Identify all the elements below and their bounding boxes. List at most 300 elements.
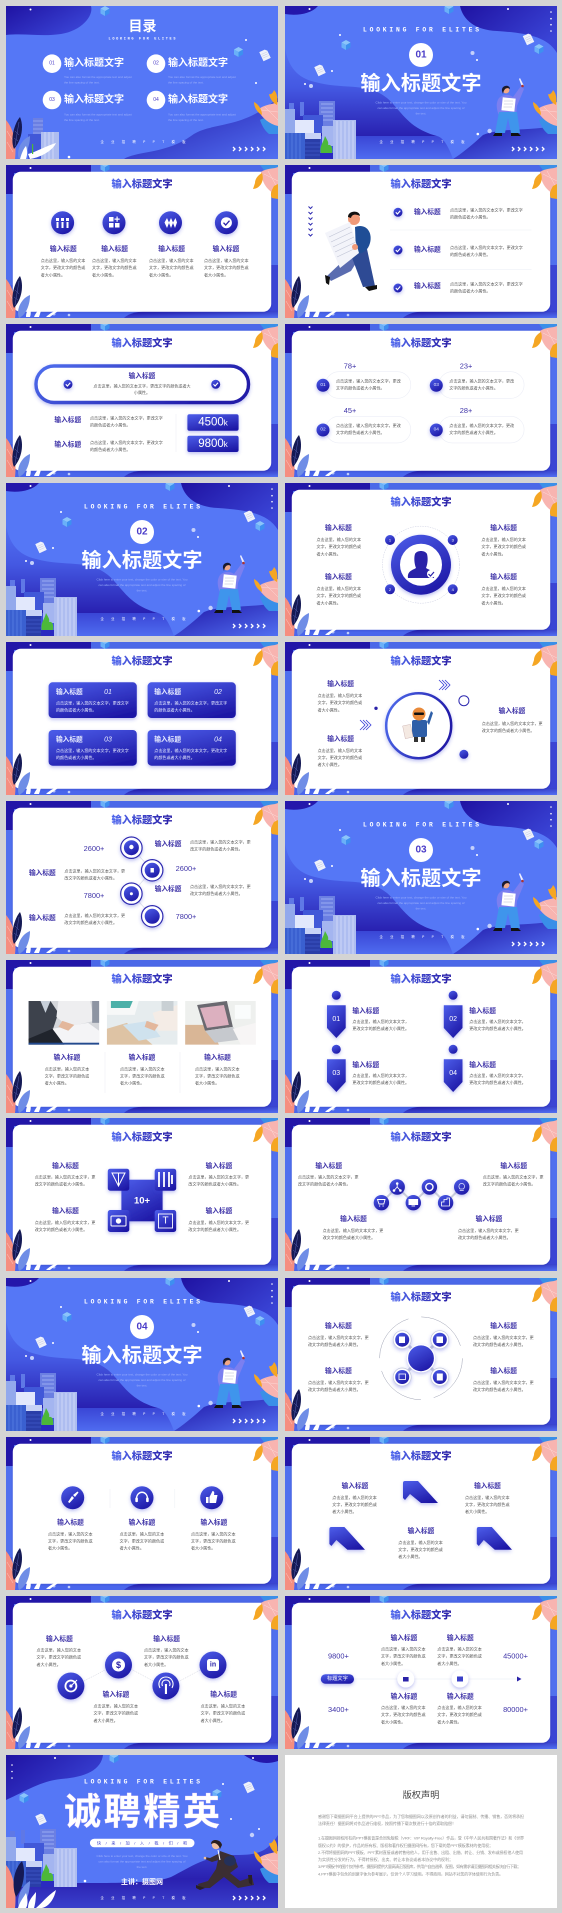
list row 2: 点击这里，输入您的文本文字，更改文字 xyxy=(450,244,523,250)
background card xyxy=(285,1275,557,1431)
background card xyxy=(285,480,557,636)
footer: 企业招聘PPT模板 xyxy=(380,934,465,939)
white panel xyxy=(285,1755,557,1908)
text block 2: 输入标题 xyxy=(153,1634,180,1643)
text block bottom left: 输入标题 xyxy=(52,1206,79,1215)
list row 1: 点击这里，输入您的文本文字，更改文字 xyxy=(450,206,523,212)
background card xyxy=(6,162,278,318)
tag 03 xyxy=(327,1045,409,1092)
text block top left: 点击这里，输入您的文本文字，更 xyxy=(298,1174,359,1180)
section description xyxy=(97,1372,188,1387)
text block bottom right: 文字，更改文字的颜色或 xyxy=(481,592,526,598)
tag 01: 输入标题 xyxy=(352,1006,379,1015)
card 03: 点击这里，输入您的文本文字，更改文字 xyxy=(56,747,129,753)
english heading: LOOKING FOR ELITES xyxy=(84,1778,200,1786)
text block top left: 改文字的颜色或者大小属性。 xyxy=(308,1341,361,1347)
copyright text: 感谢您下载摄图网平台上提供的PPT作品，为了您和摄图网以及原创作者的利益，请勿复制、传播、销售，否则将承担 xyxy=(318,1813,524,1819)
slide: zigzag icons xyxy=(285,1115,557,1271)
text block bottom right: 输入标题 xyxy=(206,1206,233,1215)
label left 2 xyxy=(29,912,125,925)
footer: 企业招聘PPT模板 xyxy=(100,1411,186,1416)
text block top right xyxy=(481,523,526,556)
footer: 企业招聘PPT模板 xyxy=(100,1895,186,1900)
description: can also format the appropriate text and adjust the line spacing of xyxy=(99,1860,186,1864)
text block bottom right: 输入标题 xyxy=(490,572,517,581)
text block bottom right: 输入标题 xyxy=(476,1214,503,1223)
text block bottom right: 改文字的颜色或者大小属性。 xyxy=(188,1226,241,1232)
label right 1 xyxy=(155,838,251,852)
tagline pill: 快 / 来 / 加 / 入 / 我 / 们 / 吧 xyxy=(97,1840,187,1846)
copyright text: 版权公约》的保护，作品的所有权、版权和著作权归摄图网所有，您下载的是PPT模板素材的使用权； xyxy=(318,1842,493,1848)
label right 2: 改文字的颜色或者大小属性。 xyxy=(190,890,243,896)
toc background xyxy=(6,6,278,159)
text block 3 xyxy=(94,1690,138,1723)
list row 1 xyxy=(394,206,523,220)
floating dots xyxy=(374,696,469,759)
column 1: 文字，更改文字的颜色或 xyxy=(48,1538,93,1544)
title: 输入标题文字 xyxy=(390,336,452,350)
text block top left xyxy=(318,679,362,712)
column 4: 者大小属性。 xyxy=(204,272,228,278)
decorative chevrons top xyxy=(439,680,450,690)
text block left: 输入标题 xyxy=(342,1481,369,1490)
toc item 03: 输入标题文字 xyxy=(64,92,124,106)
text block top 1: 点击这里，输入您的文本 xyxy=(381,1646,426,1652)
section background xyxy=(285,4,557,159)
column 2 text: 点击这里，输入您的文本 xyxy=(120,1066,165,1072)
title: 输入标题文字 xyxy=(390,178,452,190)
text block bottom 2: 文字，更改文字的颜色或 xyxy=(437,1711,482,1717)
text block bottom 2: 输入标题 xyxy=(447,1692,474,1700)
text block bottom left: 者大小属性。 xyxy=(316,600,341,606)
text block 4: 输入标题 xyxy=(210,1690,237,1698)
number badge: 02 xyxy=(136,526,148,538)
card 02: 输入标题 xyxy=(154,687,181,696)
background card xyxy=(6,798,278,954)
card 04: 点击这里，输入您的文本文字，更改文字 xyxy=(154,747,227,753)
label left 2: 输入标题 xyxy=(29,913,56,922)
tag 03: 更改文字的颜色或者大小属性。 xyxy=(352,1079,409,1085)
tag 03: 点击这里，输入您的文本文字， xyxy=(352,1072,409,1078)
text block 2: 文字，更改文字的颜色或 xyxy=(144,1654,189,1660)
toc item 02: 02 xyxy=(153,61,159,67)
text block bottom right xyxy=(473,1366,534,1392)
card 01: 的颜色或者大小属性。 xyxy=(56,706,96,712)
english heading: LOOKING FOR ELITES xyxy=(84,504,200,510)
title: 输入标题文字 xyxy=(111,654,173,668)
list row 3: 输入标题 xyxy=(414,281,441,290)
card 03: 03 xyxy=(104,736,112,744)
10+ diagram: T xyxy=(162,1216,169,1226)
copyright text: 为实质性分发的行为。不得转授权、出卖、转让本协议或者本协议中的权利； xyxy=(318,1856,453,1862)
toc item 03: 03 xyxy=(49,97,55,103)
section description xyxy=(97,578,188,592)
text block bottom: 点击这里，输入您的文本 xyxy=(398,1539,443,1545)
text block top 2: 点击这里，输入您的文本 xyxy=(437,1646,482,1652)
label left 1 xyxy=(29,868,125,880)
background card xyxy=(6,639,278,795)
text block bottom 2: 者大小属性。 xyxy=(437,1718,462,1724)
item 04: 文字的颜色或者大小属性。 xyxy=(449,429,498,435)
title: 输入标题文字 xyxy=(111,336,173,350)
number badge xyxy=(409,43,433,67)
list row 3: 的颜色或者大小属性。 xyxy=(450,288,490,294)
label right 2: 输入标题 xyxy=(155,884,182,893)
tag 01: 01 xyxy=(332,1016,340,1023)
column 1: 者大小属性。 xyxy=(48,1544,72,1550)
section description: the text. xyxy=(416,111,426,115)
background card xyxy=(6,1593,278,1749)
section description: the text. xyxy=(416,906,426,910)
text block right: 点击这里，输入您的文本 xyxy=(465,1494,510,1500)
title: 输入标题文字 xyxy=(390,1608,452,1622)
stat box 9800k xyxy=(187,436,239,452)
english heading: LOOKING FOR ELITES xyxy=(363,26,479,34)
slide: 10+ cluster xyxy=(6,1115,278,1271)
text block bottom: 输入标题 xyxy=(408,1526,435,1535)
list row 2: 的颜色或者大小属性。 xyxy=(450,251,490,257)
text block left: 者大小属性。 xyxy=(332,1508,357,1514)
stat numbers xyxy=(84,844,196,921)
toc item 01: the line spacing of the text. xyxy=(64,80,100,84)
text block bottom 1 xyxy=(381,1692,426,1724)
section description: the text. xyxy=(137,588,147,592)
slide: three round icons xyxy=(6,1434,278,1590)
card 02 xyxy=(148,682,236,718)
column 2: 者大小属性。 xyxy=(92,272,116,278)
row 2: 输入标题 xyxy=(54,440,81,448)
text block top right: 点击这里，输入您的文本文字，更 xyxy=(188,1174,249,1180)
column 3 text: 输入标题 xyxy=(204,1052,231,1062)
row 2: 的颜色或者大小属性。 xyxy=(90,446,130,452)
text block bottom xyxy=(398,1526,443,1559)
text block top left: 者大小属性。 xyxy=(316,550,341,556)
text block right: 输入标题 xyxy=(499,706,526,715)
item 03: 03 xyxy=(434,382,439,388)
section description: the text. xyxy=(137,1383,147,1387)
background card xyxy=(285,1593,557,1749)
highlighted pill: 点击这里，输入您的文本文字，更改文字的颜色或者大 xyxy=(93,382,191,388)
text block top 2: 输入标题 xyxy=(447,1633,474,1642)
column 1 text: 点击这里，输入您的文本 xyxy=(45,1066,89,1072)
column 4 xyxy=(204,211,249,278)
text block top right: 文字，更改文字的颜色或 xyxy=(481,543,526,549)
text block bottom left: 者大小属性。 xyxy=(318,761,342,767)
item 03: 点击这里，输入您的文本文字，更改 xyxy=(449,378,514,384)
column 1: 者大小属性。 xyxy=(41,272,65,278)
text block top left: 文字，更改文字的颜色或 xyxy=(316,543,361,549)
text block top right: 输入标题 xyxy=(500,1161,527,1170)
text block top right: 输入标题 xyxy=(206,1161,233,1170)
label left 1: 输入标题 xyxy=(29,868,56,877)
text block top right: 点击这里，输入您的文本 xyxy=(481,536,526,542)
label right 1: 改文字的颜色或者大小属性。 xyxy=(190,846,243,852)
background card xyxy=(285,162,557,318)
label right 2 xyxy=(155,883,251,896)
text block bottom right xyxy=(458,1214,519,1240)
card 03: 输入标题 xyxy=(56,734,83,744)
row 2: 点击这里，输入您的文本文字，更改文字 xyxy=(90,439,163,445)
toc item 01 xyxy=(43,54,132,84)
column 3 text xyxy=(195,1052,240,1086)
section description: Click here to enter your text, change the color or size of the text. You xyxy=(376,100,467,104)
stat numbers: 2600+ xyxy=(84,844,104,853)
icon wave xyxy=(57,1652,227,1700)
column 3 text: 者大小属性。 xyxy=(195,1080,219,1086)
background card xyxy=(6,321,278,477)
slide: pill and stats xyxy=(6,321,278,477)
stat box 4500k xyxy=(187,414,239,431)
section description: can also format the appropriate text and adjust the line spacing of xyxy=(378,901,465,905)
text block 3: 点击这里，输入您的文本 xyxy=(94,1702,138,1708)
slide: section 01 xyxy=(285,4,557,159)
text block bottom right xyxy=(188,1206,249,1232)
toc item 04: the line spacing of the text. xyxy=(168,118,204,122)
text block top left: 输入标题 xyxy=(315,1161,342,1170)
arrow top xyxy=(403,1481,438,1503)
main title: 诚聘精英 xyxy=(64,1792,220,1832)
text block bottom right xyxy=(481,572,526,606)
toc item 02: You can also format the appropriate text and adjust xyxy=(168,75,236,79)
text block top left xyxy=(316,523,361,556)
background card xyxy=(6,1115,278,1271)
text block top left: 输入标题 xyxy=(325,523,352,532)
slide: closing xyxy=(6,1753,278,1908)
title: 输入标题文字 xyxy=(111,178,173,190)
toc footer: 企业招聘PPT模板 xyxy=(100,139,186,144)
text block bottom left xyxy=(308,1366,369,1392)
toc item 04: You can also format the appropriate text and adjust xyxy=(168,113,236,117)
chevrons xyxy=(233,1896,265,1900)
photo: office desk xyxy=(106,1001,178,1045)
number badge: 03 xyxy=(415,844,427,856)
text block 2: 点击这里，输入您的文本 xyxy=(144,1646,189,1652)
title: 输入标题文字 xyxy=(390,654,452,668)
tagline pill xyxy=(90,1839,194,1847)
section title: 输入标题文字 xyxy=(82,1343,202,1367)
avatar diagram: 3 xyxy=(452,538,455,542)
section description xyxy=(376,896,467,910)
text block bottom: 文字，更改文字的颜色或 xyxy=(398,1546,443,1552)
tag 01: 更改文字的颜色或者大小属性。 xyxy=(352,1025,409,1031)
tag 04 xyxy=(444,1045,526,1092)
item 01: 78+ xyxy=(344,362,356,370)
section title: 输入标题文字 xyxy=(82,548,202,572)
column 1: 点击这里，输入您的文本 xyxy=(41,257,85,263)
stat numbers: 2600+ xyxy=(176,864,196,873)
stat box 4500k: 4500k xyxy=(198,417,229,429)
section description: can also format the appropriate text and adjust the line spacing of xyxy=(99,1378,186,1382)
row 1: 的颜色或者大小属性。 xyxy=(90,422,130,428)
card 02: 02 xyxy=(214,689,222,696)
text block top left: 改文字的颜色或者大小属性。 xyxy=(298,1180,351,1186)
slide: four-node chain xyxy=(6,798,278,954)
text block top left: 点击这里，输入您的文本 xyxy=(318,692,362,698)
section description xyxy=(376,102,466,114)
text block bottom left: 点击这里，输入您的文本文字，更 xyxy=(35,1219,95,1225)
text block top left: 点击这里，输入您的文本文字，更 xyxy=(35,1174,95,1180)
column 1 text xyxy=(45,1052,89,1086)
column 3: 文字，更改文字的颜色或 xyxy=(191,1538,236,1544)
background card xyxy=(6,1434,278,1590)
text block bottom right: 点击这里，输入您的文本文字，更 xyxy=(458,1227,519,1233)
background card xyxy=(285,1434,557,1590)
description: the text. xyxy=(137,1865,147,1869)
section background xyxy=(6,481,278,636)
text block bottom right: 点击这里，输入您的文本文字，更 xyxy=(473,1379,534,1385)
text block left: 文字，更改文字的颜色或 xyxy=(332,1501,377,1507)
toc item 02 xyxy=(147,54,236,84)
item 04: 28+ xyxy=(460,406,472,415)
card 03: 的颜色或者大小属性。 xyxy=(56,754,96,760)
timeline: 标题文字 xyxy=(327,1674,348,1682)
text block bottom left xyxy=(318,734,362,767)
avatar diagram xyxy=(382,526,460,603)
text block top right: 改文字的颜色或者大小属性。 xyxy=(483,1180,535,1186)
card 01: 01 xyxy=(104,689,112,696)
text block top left: 改文字的颜色或者大小属性。 xyxy=(35,1180,87,1186)
text block top right xyxy=(188,1161,249,1186)
card 01: 输入标题 xyxy=(56,687,83,696)
number badge: 01 xyxy=(415,50,427,60)
toc item 01: You can also format the appropriate text and adjust xyxy=(64,75,132,79)
title: 输入标题文字 xyxy=(390,1130,452,1144)
list row 1: 的颜色或者大小属性。 xyxy=(450,214,490,220)
title: 输入标题文字 xyxy=(111,1608,173,1622)
card 03 xyxy=(49,730,137,766)
text block top left: 点击这里，输入您的文本文字，更 xyxy=(308,1334,369,1340)
text block 3: 输入标题 xyxy=(103,1690,130,1698)
text block bottom right: 改文字的颜色或者大小属性。 xyxy=(458,1234,511,1240)
text block bottom left: 点击这里，输入您的文本文字，更 xyxy=(323,1227,383,1233)
copyright text: 法律责任！摄图网将对作品进行维权，按照传播下载次数进行十倍的索取赔偿！ xyxy=(318,1820,456,1826)
text block top left: 输入标题 xyxy=(327,679,354,688)
text block bottom left: 改文字的颜色或者大小属性。 xyxy=(35,1226,87,1232)
slide: person and list xyxy=(285,162,557,318)
closing background xyxy=(6,1753,278,1908)
slide: section 03 xyxy=(285,799,557,954)
photo: business meeting xyxy=(28,1001,100,1045)
row 1: 输入标题 xyxy=(54,415,81,424)
text block top left xyxy=(298,1161,359,1186)
text block bottom right: 点击这里，输入您的文本 xyxy=(481,585,526,591)
description: Click here to enter your text, change the color or size of the text. You xyxy=(97,1854,188,1858)
column 2: 文字，更改文字的颜色或 xyxy=(120,1538,164,1544)
column 1: 输入标题 xyxy=(50,244,77,253)
text block bottom left: 点击这里，输入您的文本文字，更 xyxy=(308,1379,369,1385)
english heading: LOOKING FOR ELITES xyxy=(84,1298,200,1306)
card 01 xyxy=(49,682,137,718)
toc item 01: 输入标题文字 xyxy=(64,56,124,69)
slide: four pills xyxy=(285,321,557,477)
label left 1: 点击这里，输入您的文本文字，更 xyxy=(64,868,125,874)
text block top left: 文字，更改文字的颜色或 xyxy=(318,699,362,705)
column 2 text: 者大小属性。 xyxy=(120,1080,144,1086)
row 1 xyxy=(54,414,163,428)
item 04: 点击这里，输入您的文本文字，更改 xyxy=(449,422,514,428)
item 04 xyxy=(430,406,524,443)
label left 2: 改文字的颜色或者大小属性。 xyxy=(64,919,117,925)
toc item 04: 04 xyxy=(153,97,159,103)
text block top 1: 输入标题 xyxy=(391,1633,418,1642)
item 02: 文字的颜色或者大小属性。 xyxy=(336,429,385,435)
text block bottom left: 输入标题 xyxy=(325,572,352,581)
column 3: 文字，更改文字的颜色或 xyxy=(149,264,194,270)
text block bottom right: 改文字的颜色或者大小属性。 xyxy=(473,1386,526,1392)
tag 02 xyxy=(444,991,526,1038)
column 2: 输入标题 xyxy=(101,244,128,253)
title: 输入标题文字 xyxy=(390,1450,452,1462)
list row 1: 输入标题 xyxy=(414,207,441,216)
item 01: 01 xyxy=(320,382,326,388)
column 1 text: 文字，更改文字的颜色或 xyxy=(45,1072,89,1078)
toc subtitle: LOOKING FOR ELITES xyxy=(108,38,176,42)
text block left: 点击这里，输入您的文本 xyxy=(332,1494,377,1500)
slide: circle with character xyxy=(285,639,557,795)
arrow left xyxy=(329,1527,365,1550)
background card xyxy=(6,957,278,1113)
stat box 9800k: 9800k xyxy=(198,438,229,450)
footer: 企业招聘PPT模板 xyxy=(380,139,465,144)
column 3: 者大小属性。 xyxy=(149,272,173,278)
text block right: 改文字的颜色或者大小属性。 xyxy=(482,727,534,733)
toc city and plants xyxy=(6,90,278,159)
text block bottom left: 点击这里，输入您的文本 xyxy=(316,585,361,591)
text block top right: 输入标题 xyxy=(490,523,517,532)
text block bottom right: 点击这里，输入您的文本文字，更 xyxy=(188,1219,249,1225)
column 2 xyxy=(120,1486,164,1550)
text block bottom 1: 输入标题 xyxy=(391,1692,418,1700)
copyright text: 2.不得将摄图网的PPT模板、PPT素材直接或者转售给他人，用于出售、出租、出借、转让、分销、发布或授权他人使用 xyxy=(318,1849,523,1855)
column 2: 文字，更改文字的颜色或 xyxy=(92,264,137,270)
text block top right: 点击这里，输入您的文本文字，更 xyxy=(473,1334,534,1340)
card 02: 点击这里，输入您的文本文字，更改文字 xyxy=(154,700,227,706)
section description: can also format the appropriate text and adjust the line spacing of xyxy=(378,106,465,110)
title: 输入标题文字 xyxy=(111,1130,173,1144)
tag 04: 点击这里，输入您的文本文字， xyxy=(469,1072,526,1078)
slide: four cards xyxy=(6,639,278,795)
title: 输入标题文字 xyxy=(390,972,452,986)
copyright text: 3.PPT模板中的图片仅供参考，摄图网提供大量高清正版图库，供用户自由选择、配图，如有需求请至摄图网相关板块自行下载； xyxy=(318,1863,521,1869)
text block top left xyxy=(308,1321,369,1347)
column 1: 文字，更改文字的颜色或 xyxy=(41,264,85,270)
item 03: 文字的颜色或者大小属性。 xyxy=(449,384,498,390)
text block 1: 输入标题 xyxy=(46,1634,73,1643)
card 04 xyxy=(148,730,236,766)
item 01: 文字的颜色或者大小属性。 xyxy=(336,384,385,390)
column 2 text xyxy=(120,1052,165,1086)
column 3: 输入标题 xyxy=(158,244,185,253)
column 1 text: 者大小属性。 xyxy=(45,1080,69,1086)
number badge xyxy=(130,1315,154,1339)
text block top right xyxy=(473,1321,534,1347)
title: 输入标题文字 xyxy=(111,972,173,986)
tag 04: 更改文字的颜色或者大小属性。 xyxy=(469,1079,526,1085)
toc item 04: 输入标题文字 xyxy=(168,92,228,106)
text block top 2: 文字，更改文字的颜色或 xyxy=(437,1652,482,1658)
text block bottom 2 xyxy=(437,1692,482,1724)
tag 03: 03 xyxy=(332,1070,340,1077)
item 01: 点击这里，输入您的文本文字，更改 xyxy=(336,378,401,384)
label right 1: 点击这里，输入您的文本文字，更 xyxy=(190,838,251,844)
text block top left: 输入标题 xyxy=(325,1321,352,1330)
toc item 03: You can also format the appropriate text and adjust xyxy=(64,113,132,117)
column 1 xyxy=(48,1486,93,1550)
section background xyxy=(6,1276,278,1431)
text block top right xyxy=(483,1161,544,1186)
text block right: 点击这里，输入您的文本文字，更 xyxy=(482,720,543,726)
text block top 2 xyxy=(437,1633,482,1666)
